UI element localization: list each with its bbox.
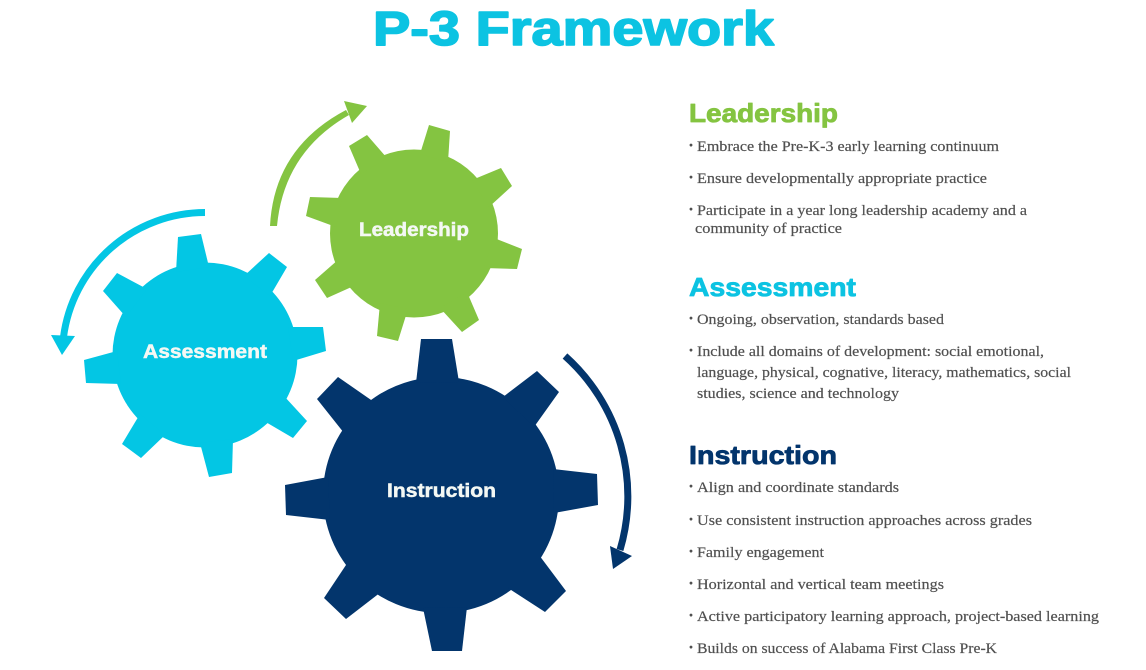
gear: Instruction: [285, 339, 598, 651]
list: Instruction points: Use consistent instruction approaches across grades: [697, 513, 1032, 529]
list: Assessment points: Include all domains of development: social emotional,: [697, 344, 1044, 360]
list: Instruction points: Align and coordinate standards: [697, 480, 899, 496]
list: Leadership points: Ensure developmentally appropriate practice: [697, 171, 987, 187]
list: Assessment points: studies, science and technology: [697, 386, 900, 402]
list: Instruction points: ·: [688, 573, 694, 593]
list: Instruction points: Family engagement: [697, 545, 825, 561]
list: Leadership points: ·: [688, 135, 694, 155]
gear: Leadership: [306, 125, 522, 341]
list: Instruction points: [688, 476, 1100, 657]
list: Assessment points: language, physical, cognative, literacy, mathematics, social: [697, 365, 1071, 381]
arrow: cyan counter-clockwise: [51, 212, 205, 355]
list: Instruction points: ·: [688, 637, 694, 657]
list: Leadership points: community of practice: [695, 221, 842, 237]
gear label: Instruction: Instruction: [387, 481, 496, 502]
list: Assessment points: Ongoing, observation, standards based: [697, 312, 945, 328]
list: Instruction points: ·: [688, 541, 694, 561]
list: Assessment points: ·: [688, 340, 694, 360]
panel: Assessment details: [688, 272, 1071, 402]
list: Instruction points: Builds on success of Alabama First Class Pre-K: [697, 641, 997, 657]
list: Leadership points: Embrace the Pre-K-3 early learning continuum: [697, 139, 999, 155]
heading: Leadership: Leadership: [689, 98, 838, 128]
title: P-3 Framework: [373, 3, 774, 56]
arrow: navy clockwise: [565, 356, 632, 569]
list: Instruction points: ·: [688, 476, 694, 496]
list: Assessment points: [688, 308, 1071, 402]
list: Leadership points: Participate in a year long leadership academy and a: [697, 203, 1027, 219]
list: Instruction points: ·: [688, 605, 694, 625]
list: Leadership points: ·: [688, 167, 694, 187]
list: Assessment points: ·: [688, 308, 694, 328]
list: Leadership points: ·: [688, 199, 694, 219]
heading: Assessment: Assessment: [689, 272, 856, 302]
gear label: Leadership: Leadership: [359, 220, 469, 241]
list: Instruction points: Horizontal and vertical team meetings: [697, 577, 944, 593]
list: Instruction points: ·: [688, 509, 694, 529]
gear label: Assessment: Assessment: [143, 342, 268, 363]
heading: Instruction: Instruction: [689, 440, 837, 470]
list: Leadership points: [688, 135, 1027, 237]
list: Instruction points: Active participatory learning approach, project-based learning: [697, 609, 1100, 625]
panel: Instruction details: [688, 440, 1100, 657]
gear: Assessment: [84, 234, 326, 477]
panel: Leadership details: [688, 98, 1027, 237]
arrow: green clockwise: [270, 101, 367, 226]
